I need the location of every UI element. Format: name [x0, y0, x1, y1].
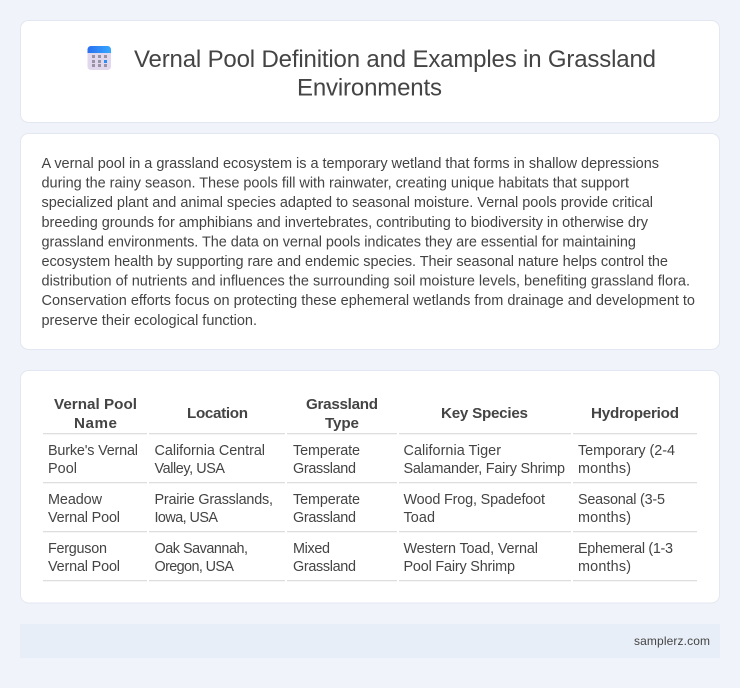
- text block: vernal pool definition: ecosystem health by supporting rare and endemic species. Their seasonal nature helps control the: [42, 254, 668, 270]
- title: [134, 46, 656, 102]
- table row: Meadow Vernal Pool: Prairie Grasslands,: [154, 492, 273, 508]
- text block: vernal pool definition: distribution of nutrients and influences the surrounding soil moisture levels, benefiting grassland flora.: [42, 274, 690, 290]
- table row: Burke's Vernal Pool: Burke's Vernal: [48, 443, 138, 459]
- table row: Meadow Vernal Pool: [43, 492, 697, 532]
- table header row: Name: [74, 415, 117, 432]
- table row: Burke's Vernal Pool: [43, 443, 697, 483]
- table row: Meadow Vernal Pool: Temperate: [293, 492, 360, 508]
- panel: title card: [20, 20, 720, 122]
- table row: Ferguson Vernal Pool: Vernal Pool: [48, 559, 120, 575]
- table header row: Grassland: [306, 396, 378, 413]
- table row: Burke's Vernal Pool: Valley, USA: [154, 461, 225, 477]
- text block: vernal pool definition: specialized plant and animal species adapted to seasonal moisture. Vernal pools provide critical: [42, 195, 653, 211]
- table row: Meadow Vernal Pool: Grassland: [293, 510, 356, 526]
- table header row: Key Species: [441, 405, 528, 422]
- table row: Ferguson Vernal Pool: Oregon, USA: [154, 559, 234, 575]
- table row: Meadow Vernal Pool: Iowa, USA: [154, 510, 218, 526]
- footer: [20, 624, 720, 658]
- table row: Burke's Vernal Pool: Grassland: [293, 461, 356, 477]
- table row: Ferguson Vernal Pool: Oak Savannah,: [154, 541, 248, 557]
- table row: Ferguson Vernal Pool: Western Toad, Vernal: [404, 541, 538, 557]
- text block: vernal pool definition: during the rainy season. These pools fill with rainwater, creating unique habitats that support: [42, 176, 629, 192]
- table row: Ferguson Vernal Pool: months): [578, 559, 631, 575]
- panel: description: [20, 134, 720, 350]
- table row: Ferguson Vernal Pool: Pool Fairy Shrimp: [404, 559, 515, 575]
- text block: vernal pool definition: grassland environments. The data on vernal pools indicates they are essential for maintaining: [42, 234, 636, 250]
- table row: Meadow Vernal Pool: Vernal Pool: [48, 510, 120, 526]
- text block: vernal pool definition: preserve their ecological function.: [42, 313, 257, 329]
- table row: Ferguson Vernal Pool: [43, 541, 697, 581]
- table row: Burke's Vernal Pool: Temporary (2-4: [578, 443, 675, 459]
- table row: Burke's Vernal Pool: months): [578, 461, 631, 477]
- table row: Ferguson Vernal Pool: Ephemeral (1-3: [578, 541, 673, 557]
- table header row: Vernal Pool: [54, 396, 137, 413]
- table header row: Type: [325, 415, 359, 432]
- title: Environments: [297, 74, 442, 102]
- table row: Ferguson Vernal Pool: Mixed: [293, 541, 330, 557]
- table row: Ferguson Vernal Pool: Ferguson: [48, 541, 107, 557]
- table row: Ferguson Vernal Pool: Grassland: [293, 559, 356, 575]
- text block: vernal pool definition: A vernal pool in a grassland ecosystem is a temporary wetland that forms in shallow depressions: [42, 156, 659, 172]
- table row: Meadow Vernal Pool: Meadow: [48, 492, 103, 508]
- table header row: Location: [187, 405, 248, 422]
- table row: Meadow Vernal Pool: months): [578, 510, 631, 526]
- table row: Meadow Vernal Pool: Seasonal (3-5: [578, 492, 665, 508]
- text block: vernal pool definition: Conservation efforts focus on protecting these ephemeral wetlands from drainage and development to: [42, 293, 695, 309]
- table row: Burke's Vernal Pool: Temperate: [293, 443, 360, 459]
- table header row: [43, 396, 697, 434]
- title: Vernal Pool Definition and Examples in Grassland: [134, 46, 656, 73]
- table row: Meadow Vernal Pool: Toad: [404, 510, 435, 526]
- table header row: Hydroperiod: [591, 405, 679, 422]
- panel: vernal pool table: [20, 370, 720, 603]
- table row: Burke's Vernal Pool: Salamander, Fairy Shrimp: [404, 461, 565, 477]
- text block: vernal pool definition: breeding grounds for amphibians and invertebrates, contributing to biodiversity in otherwise dry: [42, 215, 649, 231]
- icon: calendar: [88, 46, 111, 70]
- text block: vernal pool definition: [42, 156, 695, 329]
- table row: Burke's Vernal Pool: Pool: [48, 461, 77, 477]
- table row: Meadow Vernal Pool: Wood Frog, Spadefoot: [404, 492, 545, 508]
- footer: samplerz.com: [634, 634, 710, 648]
- table row: Burke's Vernal Pool: California Tiger: [404, 443, 501, 459]
- table row: Burke's Vernal Pool: California Central: [154, 443, 265, 459]
